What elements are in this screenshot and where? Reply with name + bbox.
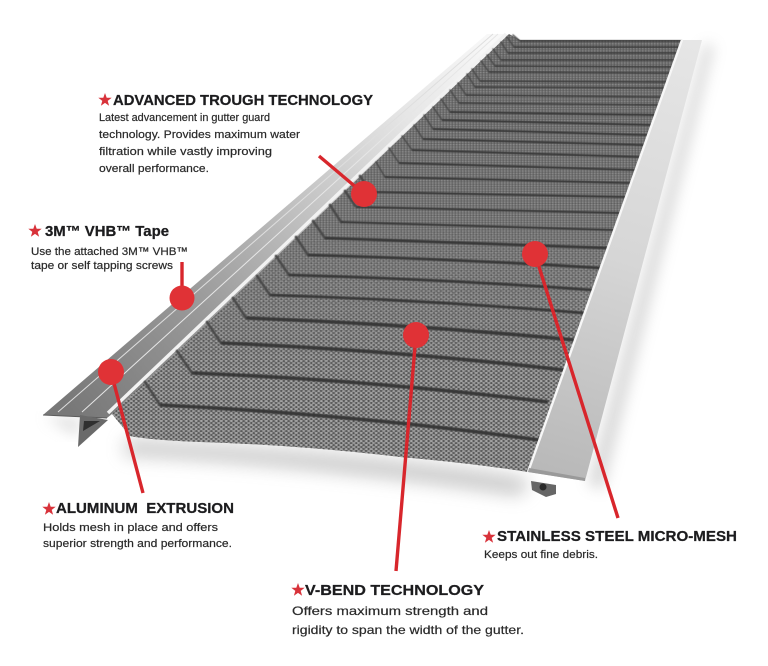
v-bend chevrons [145, 35, 520, 405]
body text: overall performance. [99, 163, 209, 175]
heading: STAINLESS STEEL MICRO-MESH [497, 529, 737, 545]
body text: rigidity to span the width of the gutter. [292, 623, 524, 637]
shadow under mesh [125, 440, 530, 495]
body text: Offers maximum strength and [292, 604, 488, 618]
body text [99, 112, 300, 175]
right rail foot [531, 481, 556, 497]
star icon [98, 93, 112, 106]
callout: aluminum extrusion [42, 501, 234, 550]
star icon [482, 530, 496, 543]
callout: stainless steel micro-mesh [482, 529, 737, 561]
pointer: advanced trough [319, 156, 377, 207]
heading: ALUMINUM EXTRUSION [56, 501, 234, 517]
gutter guard product photo [43, 34, 714, 497]
left rail foot [78, 415, 108, 447]
right aluminum rail [528, 40, 702, 481]
body text [292, 604, 524, 637]
body text: Keeps out fine debris. [484, 549, 598, 561]
callout: v-bend technology [291, 583, 524, 637]
body text: technology. Provides maximum water [99, 129, 300, 141]
heading: ADVANCED TROUGH TECHNOLOGY [113, 93, 373, 109]
pointer: v-bend [396, 322, 429, 571]
body text [43, 522, 232, 550]
callout: 3M VHB tape [28, 224, 188, 272]
body text: Latest advancement in gutter guard [99, 112, 270, 124]
body text: Use the attached 3M™ VHB™ [31, 246, 188, 258]
callout pointers [98, 156, 618, 571]
mesh trough ribs [160, 41, 682, 440]
star icon [42, 502, 56, 515]
body text: Holds mesh in place and offers [43, 522, 219, 534]
heading: 3M™ VHB™ Tape [45, 224, 169, 240]
star icon [291, 583, 305, 596]
star icon [28, 224, 42, 237]
body text: superior strength and performance. [43, 538, 232, 550]
left aluminum rail [43, 34, 509, 418]
shadow under left rail [45, 417, 80, 436]
micro mesh [112, 34, 682, 472]
body text: tape or self tapping screws [31, 260, 174, 272]
pointer: stainless micro-mesh [522, 241, 618, 518]
body text [31, 246, 188, 272]
pointer: 3M tape [170, 262, 194, 310]
body text: filtration while vastly improving [99, 146, 272, 158]
heading: V-BEND TECHNOLOGY [305, 583, 484, 599]
pointer: aluminum extrusion [98, 359, 143, 493]
shadow beside right rail [588, 44, 714, 490]
callout: advanced trough technology [98, 93, 373, 175]
